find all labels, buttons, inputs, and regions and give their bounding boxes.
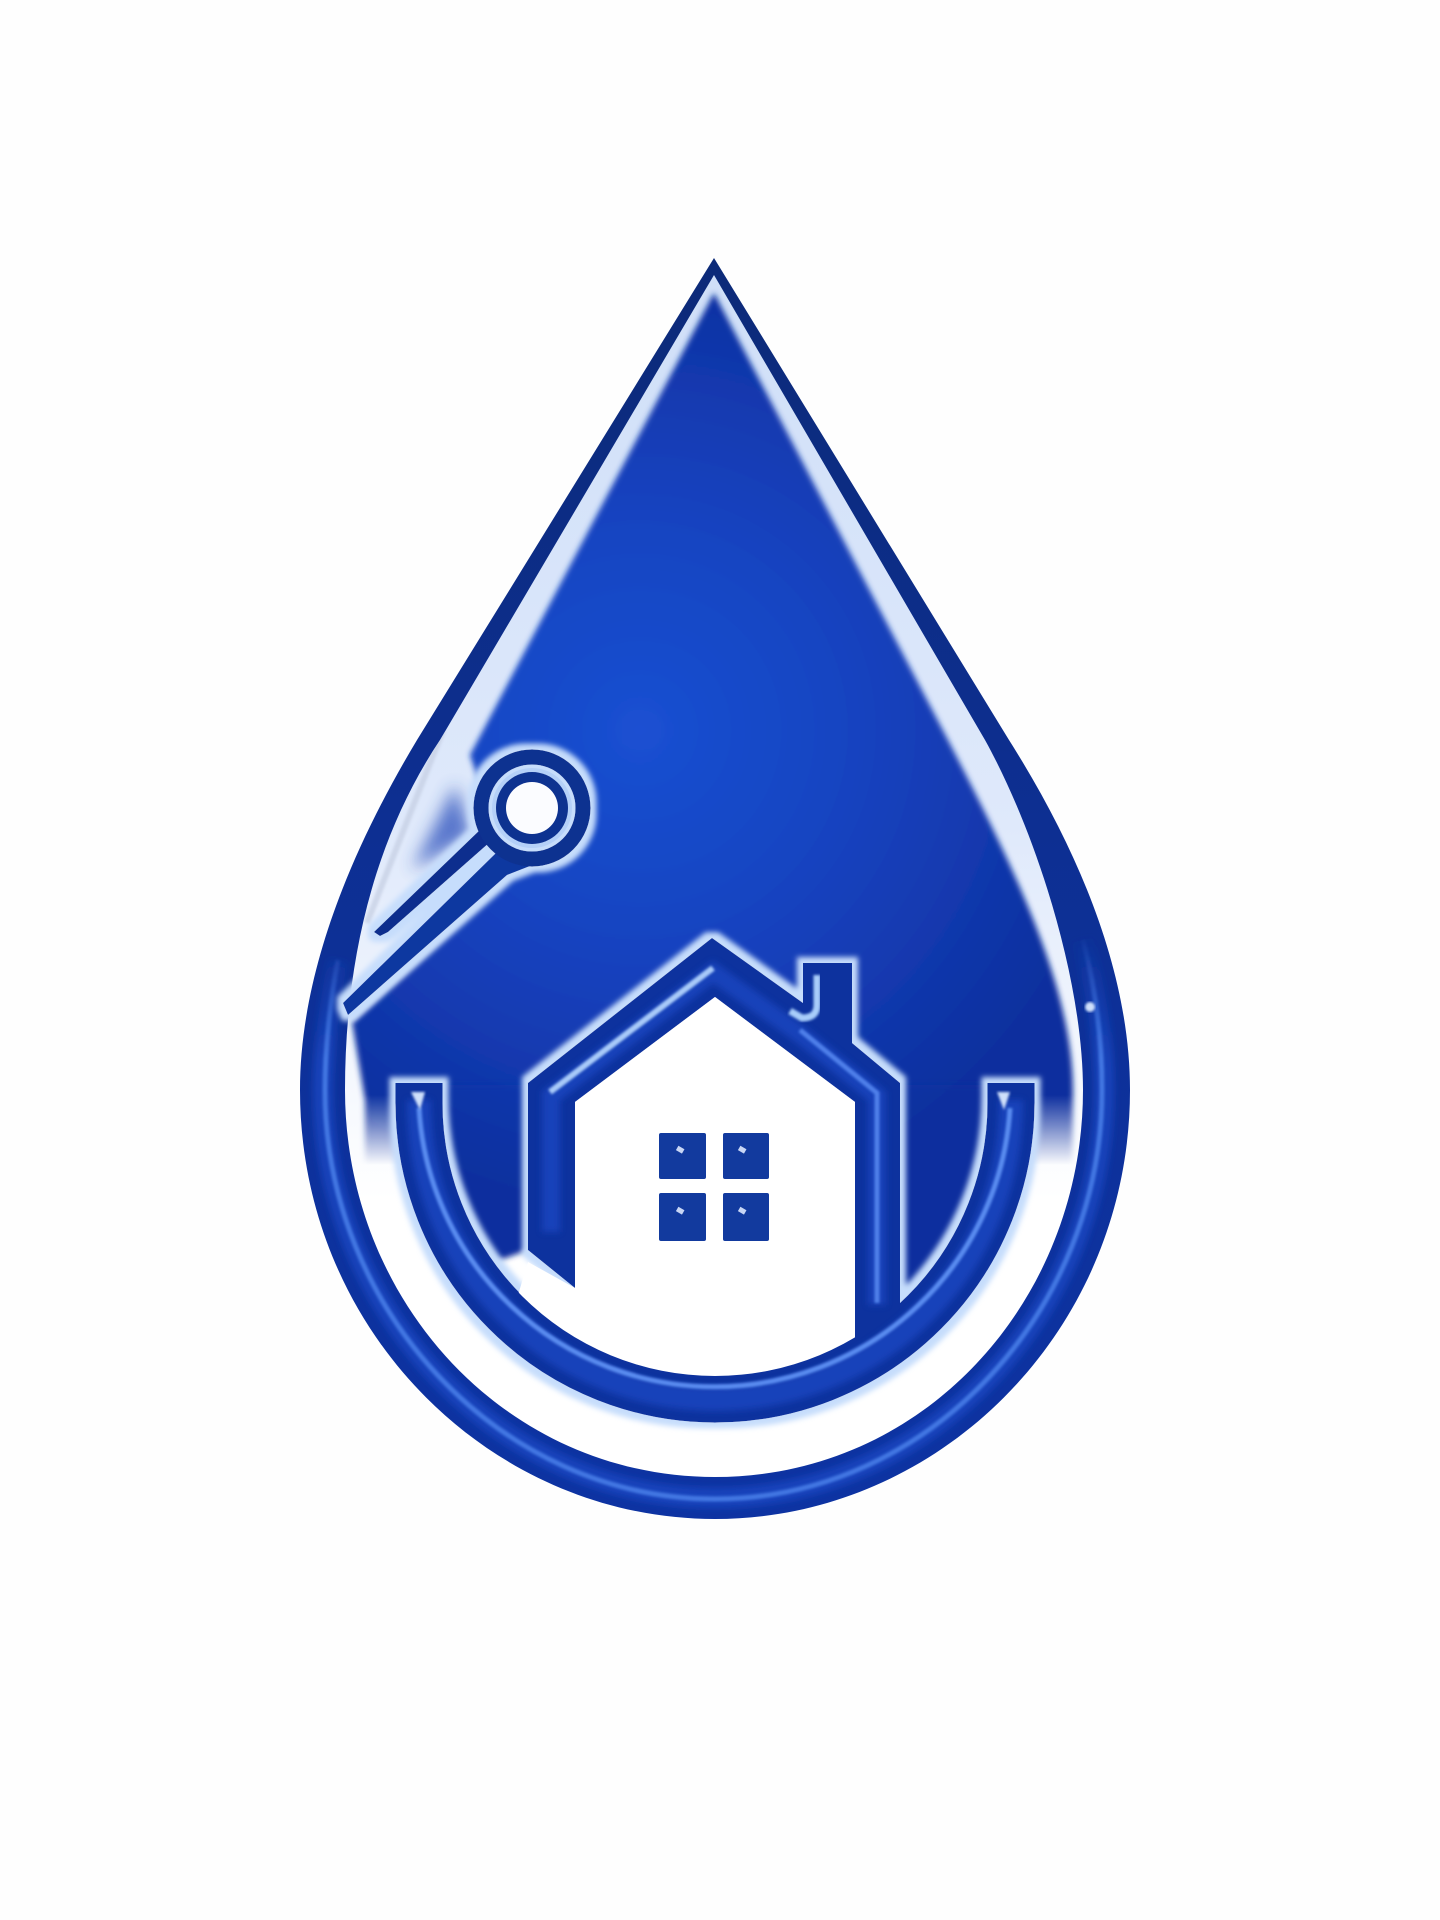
house white body [518,997,855,1376]
drop inner pale gap [345,275,1083,1477]
drop outer band [300,258,1130,1519]
house window [659,1133,769,1241]
pipe and house outline [419,938,1011,1399]
drop blue interior [352,293,1073,1345]
house outline with chimney [528,938,900,1350]
right band highlight [1085,1002,1095,1012]
house outline highlights [550,968,877,1305]
U-shaped pipe [419,1083,1011,1399]
pipe highlight [411,1092,1011,1399]
logo: water drop with house [300,258,1130,1519]
magnifier ring with handle [343,757,583,1015]
